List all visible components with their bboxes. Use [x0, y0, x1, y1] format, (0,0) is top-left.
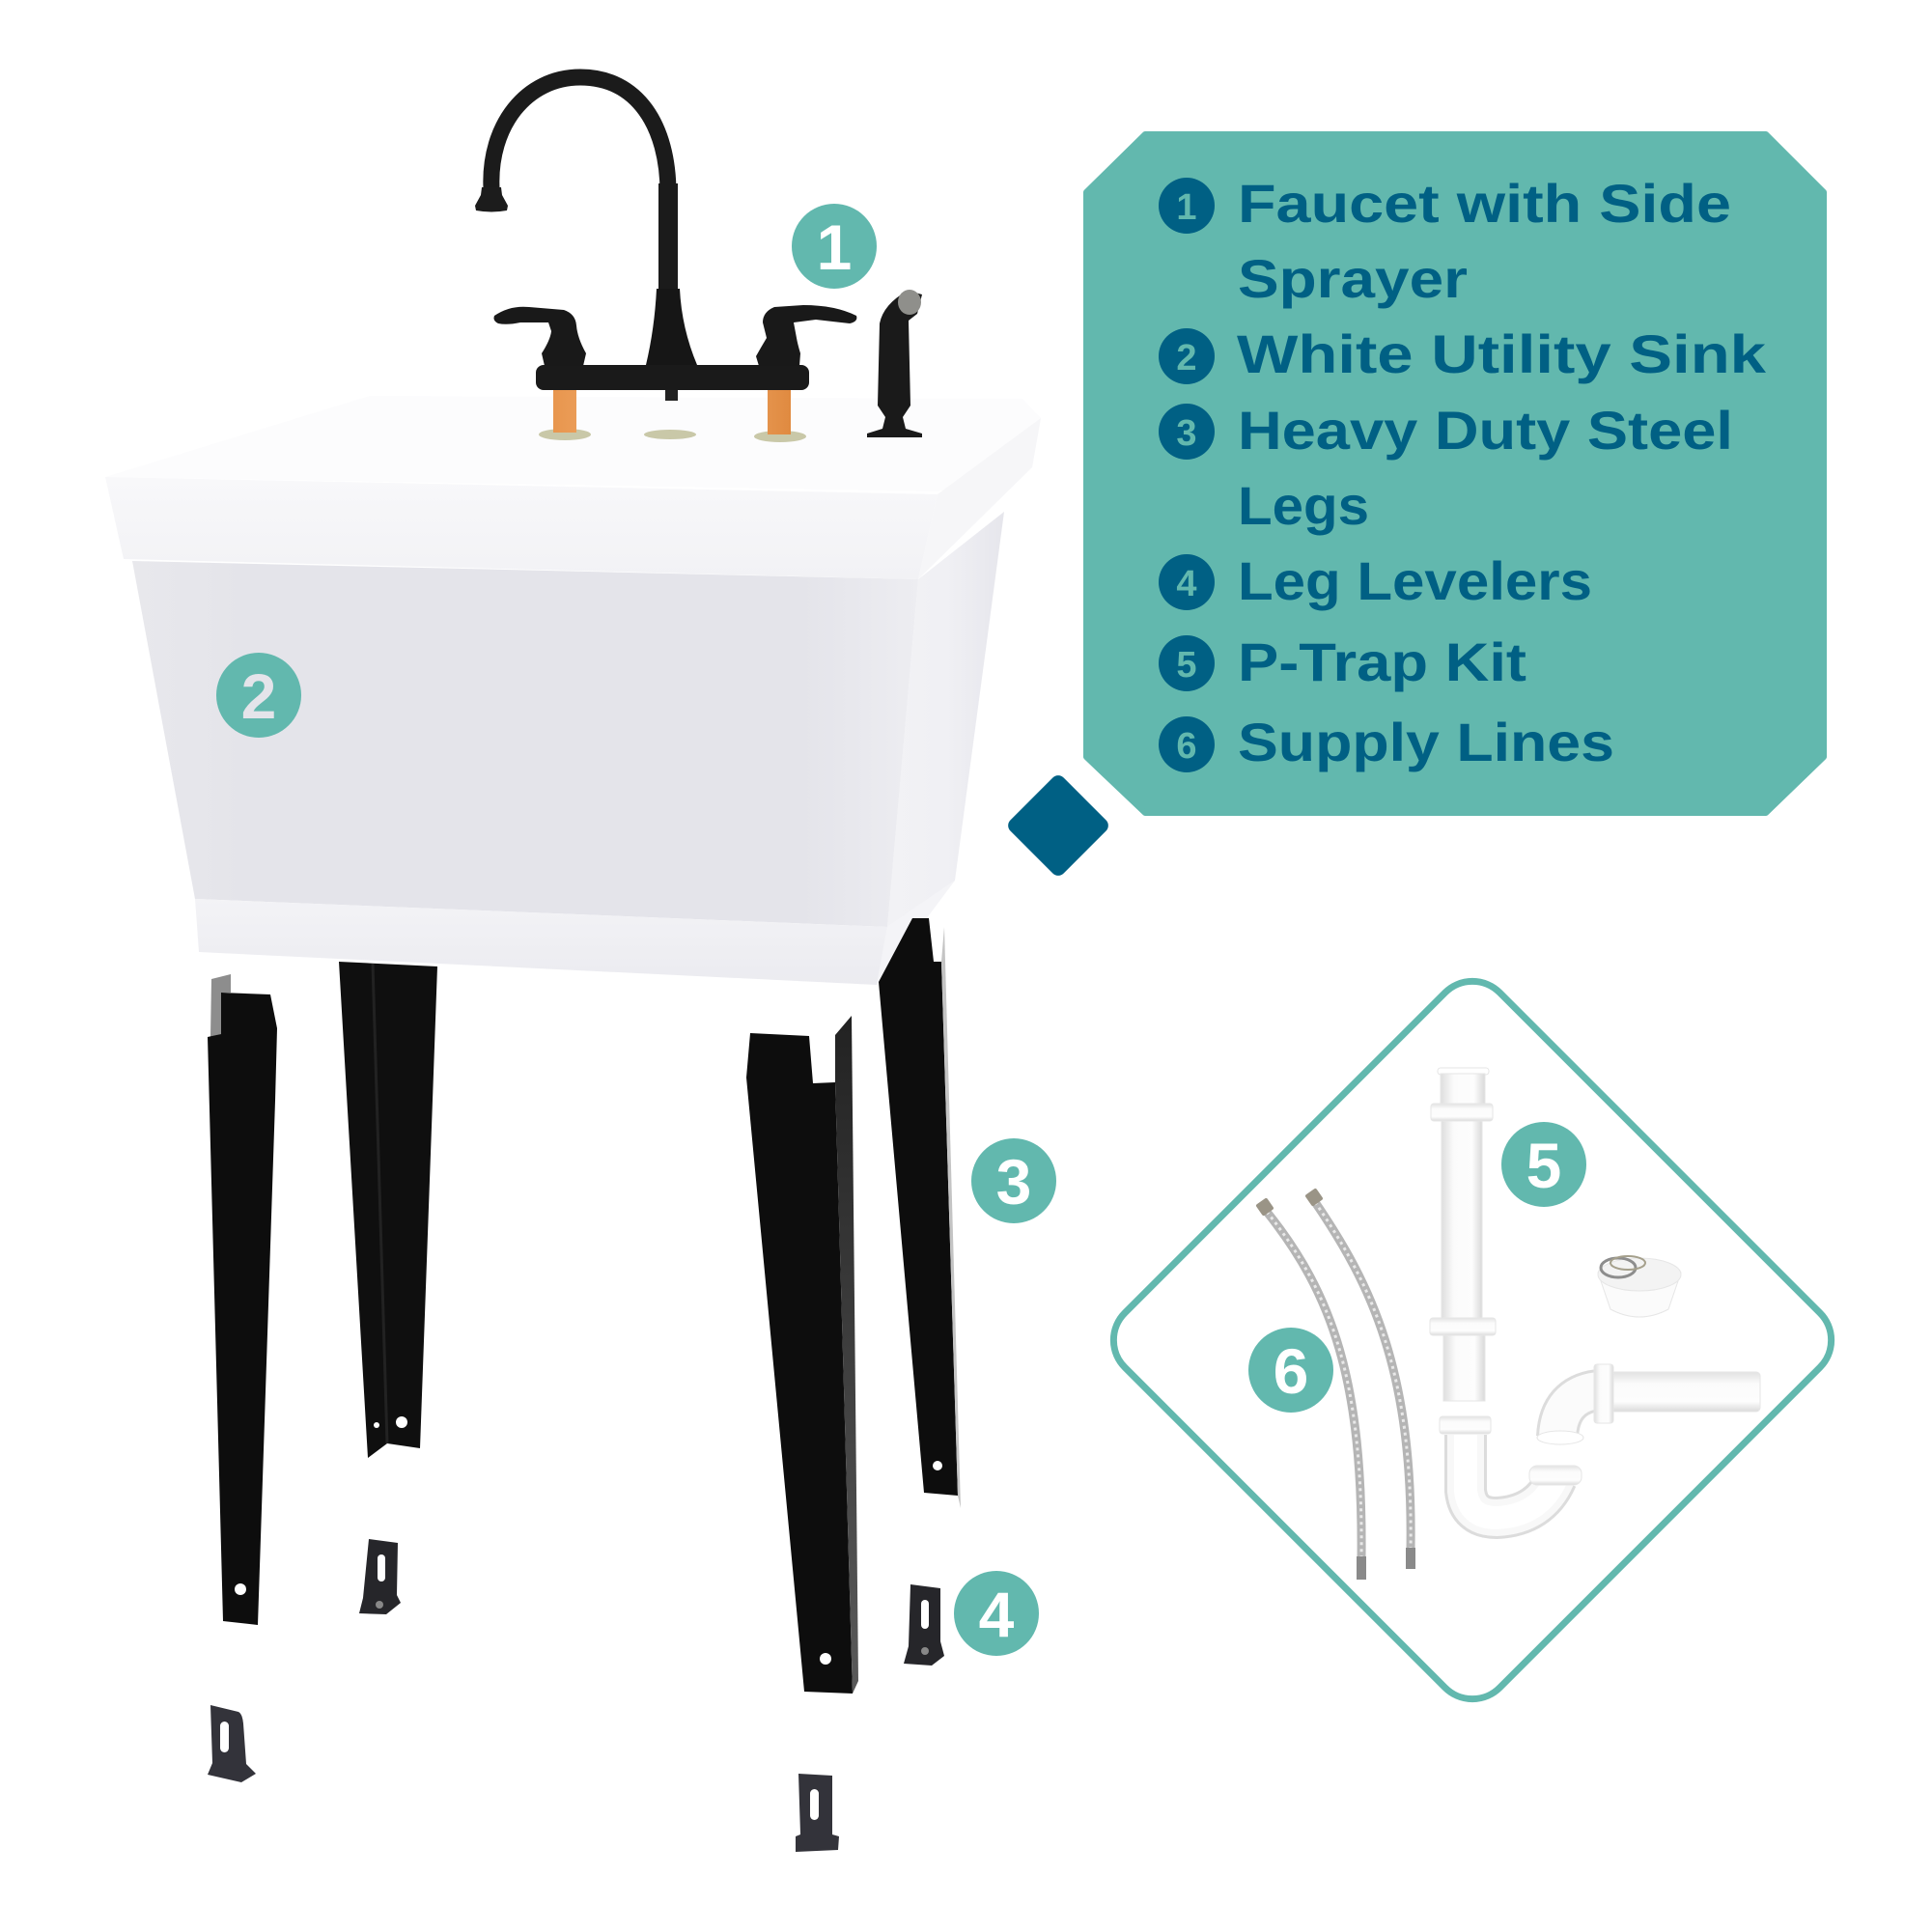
item 4: 4: [1176, 564, 1197, 604]
tailpiece upper: [1430, 1068, 1496, 1401]
item 3: [1159, 400, 1733, 536]
p-trap kit: [1430, 1068, 1760, 1518]
center stem: [665, 390, 678, 401]
sprayer head: [898, 290, 921, 315]
front right leg: [746, 1016, 858, 1694]
callout 3: 3: [996, 1146, 1031, 1218]
item 3: Heavy Duty Steel: [1238, 400, 1733, 461]
item 5: [1159, 631, 1526, 692]
callout 2: [216, 653, 301, 738]
supply line left: [1255, 1197, 1366, 1580]
center base: [646, 289, 697, 365]
item 2: White Utility Sink: [1237, 323, 1767, 384]
item 1: [1159, 173, 1731, 309]
panel background: [1086, 134, 1824, 813]
spout: [491, 77, 668, 294]
callout 6: [1248, 1328, 1333, 1413]
back right leg: [879, 918, 961, 1508]
leveler front right: [796, 1774, 839, 1852]
item 1: 1: [1176, 187, 1197, 228]
item 1: Faucet with Side: [1238, 173, 1731, 234]
right handle: [756, 305, 856, 366]
side sprayer: [867, 290, 922, 437]
u-bend: [1440, 1416, 1582, 1518]
item 3: Legs: [1238, 475, 1369, 536]
left escutcheon: [539, 429, 591, 440]
item 5: 5: [1176, 645, 1197, 686]
aerator: [475, 187, 508, 212]
item 6: 6: [1176, 726, 1197, 767]
leveler front left: [208, 1705, 256, 1782]
callout 4: [954, 1571, 1039, 1656]
leveler back right: [904, 1584, 944, 1666]
legs: [208, 918, 961, 1694]
lower right corner: [877, 881, 955, 985]
callout 5: [1501, 1122, 1586, 1207]
front left leg: [208, 974, 277, 1625]
front face: [132, 561, 918, 927]
right rim: [918, 418, 1041, 579]
accent diamond: [1005, 772, 1111, 879]
supply lines: [1255, 1188, 1415, 1580]
right copper stem: [768, 390, 791, 434]
panel: parts list: [1086, 134, 1824, 813]
callout 6: 6: [1274, 1335, 1308, 1407]
callout 3: [971, 1138, 1056, 1223]
item 6: Supply Lines: [1238, 712, 1614, 772]
supply line right: [1304, 1188, 1415, 1569]
basin inner top: [105, 396, 1041, 491]
faucet: [475, 77, 856, 442]
sprayer body: [867, 291, 922, 437]
left copper stem: [553, 390, 576, 433]
callout 2: 2: [241, 660, 276, 732]
sink basin: [105, 396, 1041, 985]
center escutcheon: [644, 430, 696, 439]
item 3: 3: [1176, 413, 1197, 454]
diamond frame: accessories: [1098, 966, 1847, 1715]
left handle: [494, 307, 586, 366]
leveler back left: [359, 1539, 401, 1614]
leg levelers: [208, 1539, 944, 1852]
elbow arm: [1537, 1364, 1760, 1444]
callout 1: [792, 204, 877, 289]
item 1: Sprayer: [1238, 248, 1468, 309]
item 2: 2: [1176, 338, 1197, 378]
rubber stopper: [1598, 1256, 1681, 1317]
spout lower column: [658, 183, 678, 294]
callout 5: 5: [1526, 1130, 1561, 1201]
callout 1: 1: [817, 211, 852, 283]
front rim: [105, 477, 938, 579]
item 4: Leg Levelers: [1238, 550, 1592, 611]
right escutcheon: [754, 431, 806, 442]
deck plate: [536, 365, 809, 390]
right side face: [887, 512, 1004, 927]
bottom band: [195, 899, 887, 985]
back left leg: [339, 962, 437, 1458]
callout 4: 4: [979, 1579, 1015, 1650]
item 5: P-Trap Kit: [1238, 631, 1526, 692]
